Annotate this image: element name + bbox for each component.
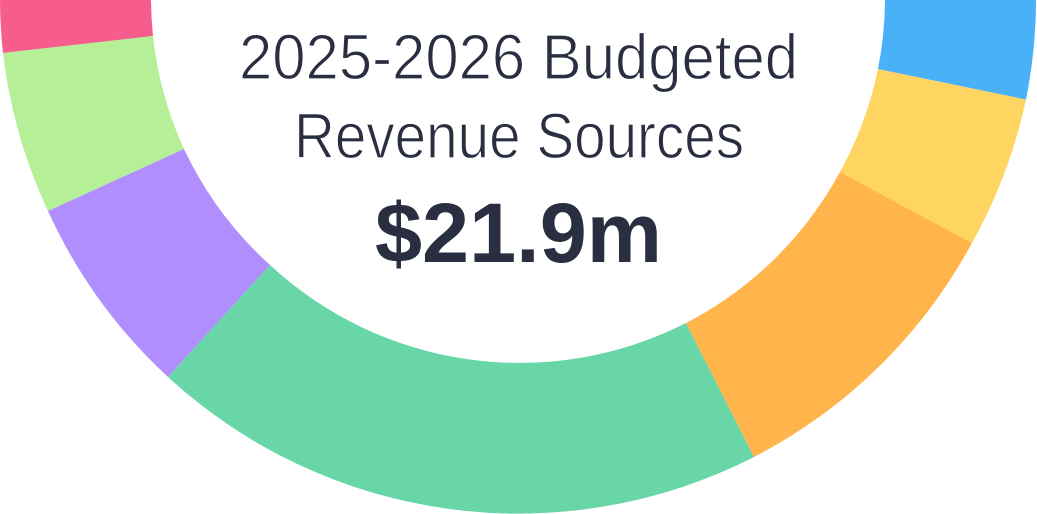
total amount: $21.9m [375,186,662,280]
segment: blue [878,0,1036,100]
segment: yellow [840,69,1026,243]
segment: pink [0,0,153,53]
segment: purple [48,149,270,377]
segment: orange [686,172,972,457]
heading line 1: 2025-2026 Budgeted [239,21,798,93]
segment: light green [3,36,184,211]
segment: teal green [168,265,754,514]
heading line 2: Revenue Sources [294,100,744,172]
title text block [239,21,798,280]
